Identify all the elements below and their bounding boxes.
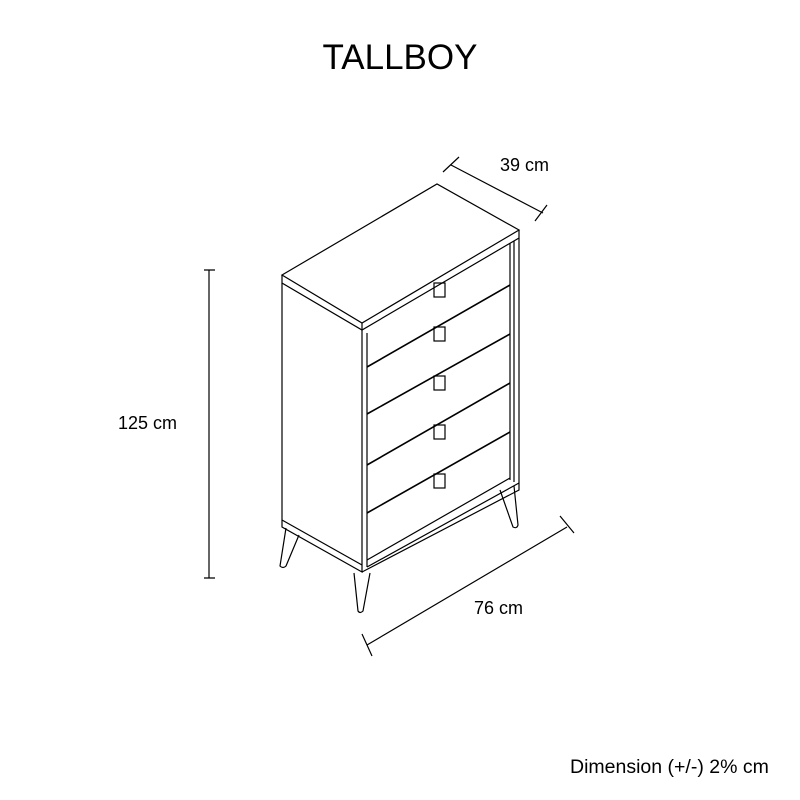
label: 76 cm: 76 cm (474, 598, 523, 618)
legs (280, 486, 518, 612)
footnote: Dimension (+/-) 2% cm (570, 756, 769, 778)
title: TALLBOY (322, 38, 477, 77)
label: 125 cm: 125 cm (118, 413, 177, 433)
label: 39 cm: 39 cm (500, 155, 549, 175)
drawer handles (434, 283, 445, 488)
dimension: depth (443, 157, 547, 221)
dimension: height (204, 270, 215, 578)
dimension: width (362, 516, 574, 656)
cabinet body (282, 184, 519, 572)
